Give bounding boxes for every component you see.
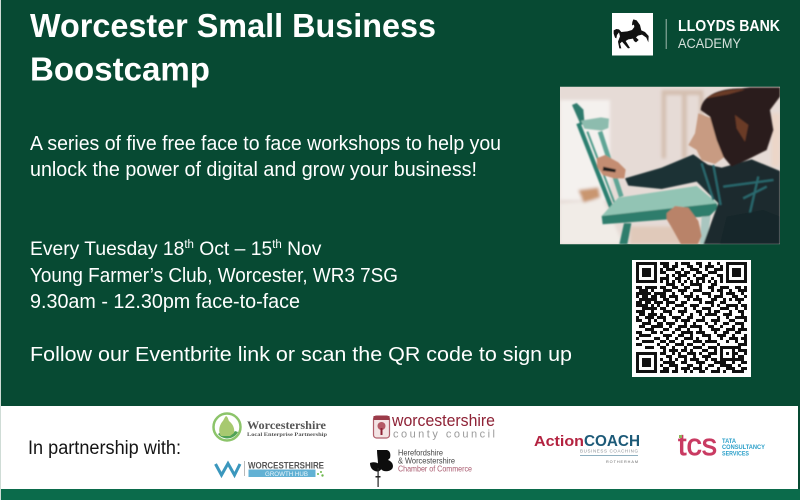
logo: ActionCOACH: Action: [534, 433, 584, 450]
logo: ActionCOACH: ROTHERHAM: [606, 460, 638, 464]
logo: Worcestershire Growth Hub: [216, 460, 324, 478]
logo: Worcestershire LEP: [214, 414, 327, 440]
event details: Nov: [282, 239, 322, 260]
logo: Herefordshire and Worcestershire Chamber of Commerce: Chamber of Commerce: [398, 464, 472, 474]
QR data modules: [636, 264, 747, 372]
logo: Tata Consultancy Services: TATA: [722, 438, 736, 445]
event details: Every Tuesday 18: [30, 239, 184, 260]
QR alignment pattern: [720, 346, 735, 361]
logo: Tata Consultancy Services: SERVICES: [722, 450, 750, 458]
logo: Worcestershire Growth Hub: WORCESTERSHIRE: [248, 460, 324, 472]
logo: ActionCOACH: COACH: [584, 433, 640, 450]
logo: Worcestershire Growth Hub: GROWTH HUB: [265, 471, 308, 478]
QR code: [632, 260, 751, 377]
logo: Tata Consultancy Services: CONSULTANCY: [722, 444, 766, 451]
logo: Tata Consultancy Services: tcs: [678, 427, 717, 462]
logo: Lloyds Bank Academy: [612, 13, 781, 56]
title: Boostcamp: [30, 50, 210, 88]
event details: [30, 239, 398, 313]
logo: Worcestershire LEP: Local Enterprise Partnership: [247, 432, 327, 438]
logo: Tata Consultancy Services: [678, 427, 766, 462]
logo: Worcestershire County Council: worcestershire: [391, 411, 495, 430]
event details: 9.30am - 12.30pm face-to-face: [30, 291, 300, 313]
partner band: [1, 406, 800, 500]
logo: Herefordshire and Worcestershire Chamber of Commerce: Herefordshire: [398, 448, 443, 458]
partner heading: In partnership with:: [28, 438, 181, 459]
event details: th: [184, 239, 194, 251]
call to action: Follow our Eventbrite link or scan the QR code to sign up: [30, 343, 572, 366]
logo: ActionCOACH: [534, 433, 640, 464]
logo: Herefordshire and Worcestershire Chamber of Commerce: & Worcestershire: [398, 456, 455, 466]
intro text: A series of five free face to face workshops to help you: [30, 133, 501, 155]
event details: Oct – 15: [194, 239, 272, 260]
photo: woman painting a chair: [560, 87, 780, 244]
QR finder pattern: top left: [636, 262, 657, 283]
logo: ActionCOACH: BUSINESS COACHING: [580, 448, 638, 454]
logo: Lloyds Bank Academy: LLOYDS BANK: [678, 18, 781, 35]
intro text: [30, 133, 501, 181]
event details: th: [272, 239, 282, 251]
title: [30, 7, 436, 88]
logo: Lloyds Bank Academy: ACADEMY: [678, 35, 742, 51]
logo: Worcestershire LEP: Worcestershire: [247, 420, 326, 432]
logo: Worcestershire County Council: county council: [393, 428, 495, 440]
intro text: unlock the power of digital and grow your business!: [30, 159, 477, 181]
icon: black horse: [612, 13, 653, 56]
title: Worcester Small Business: [30, 7, 436, 44]
logo: Worcestershire County Council: [374, 411, 495, 440]
logo: Herefordshire and Worcestershire Chamber of Commerce: [370, 448, 472, 487]
QR finder pattern: bottom left: [636, 352, 657, 373]
QR finder pattern: top right: [726, 262, 747, 283]
event details: Young Farmer’s Club, Worcester, WR3 7SG: [30, 265, 398, 287]
